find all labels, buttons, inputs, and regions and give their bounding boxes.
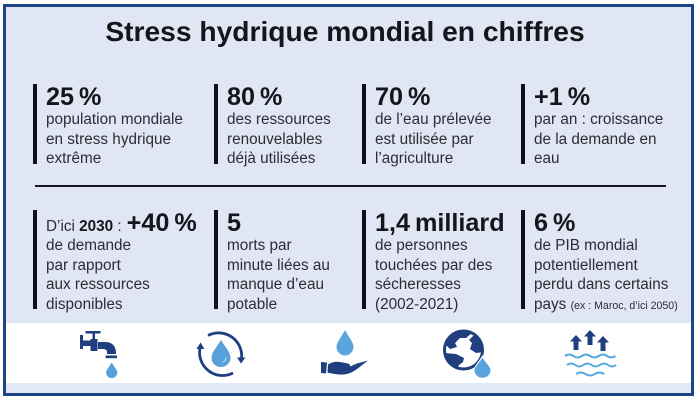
icon: water cycle <box>196 333 246 376</box>
stat: D'ici 2030 +40 %: D’ici 2030 : +40 % <box>46 209 197 237</box>
stat: 70 %: est utilisée par <box>375 131 474 148</box>
stat: 80 %: déjà utilisées <box>227 150 315 167</box>
stat: 6 %: potentiellement <box>534 257 638 274</box>
stat: 80 %: renouvelables <box>227 131 322 148</box>
divider <box>35 185 666 186</box>
stat: 5: minute liées au <box>227 257 330 274</box>
stat: +1 %: eau <box>534 150 560 167</box>
icon: rising water <box>565 330 616 376</box>
stat: 80 % <box>214 83 331 167</box>
stat: D'ici 2030 +40 %: disponibles <box>46 296 123 313</box>
stat: 25 %: extrême <box>46 150 101 167</box>
stat: 80 %: des ressources <box>227 111 331 128</box>
stat: 6 %: 6 % <box>534 209 575 237</box>
stat: 6 %: de PIB mondial <box>534 237 638 254</box>
stat: 70 %: de l’eau prélevée <box>375 111 492 128</box>
stat: +1 %: +1 % <box>534 83 590 111</box>
icon: globe with drop <box>444 331 492 379</box>
stat: +1 % <box>521 83 663 167</box>
stat: 5: morts par <box>227 237 292 254</box>
stat: 25 % <box>33 83 183 167</box>
stat: 6 %: pays (ex : Maroc, d’ici 2050) <box>534 296 678 313</box>
stat: 5: 5 <box>227 209 241 237</box>
stat: D'ici 2030 +40 % <box>33 209 197 313</box>
stat: 1,4 milliard: 1,4 milliard <box>375 209 505 237</box>
stat: 6 %: perdu dans certains <box>534 276 668 293</box>
stat: 80 %: 80 % <box>227 83 282 111</box>
stat: 1,4 milliard: (2002-2021) <box>375 296 458 313</box>
stat: D'ici 2030 +40 %: aux ressources <box>46 276 150 293</box>
stat: D'ici 2030 +40 %: par rapport <box>46 257 121 274</box>
stat: +1 %: par an : croissance <box>534 111 663 128</box>
stat: 25 %: population mondiale <box>46 111 183 128</box>
title: Stress hydrique mondial en chiffres <box>105 15 585 47</box>
stat: 5 <box>214 209 330 313</box>
stat: 70 %: 70 % <box>375 83 430 111</box>
icon: tap <box>80 331 117 378</box>
icon strip <box>6 323 691 383</box>
stat: 25 %: en stress hydrique <box>46 131 171 148</box>
stat: 5: manque d’eau <box>227 276 324 293</box>
stat: 70 %: l’agriculture <box>375 150 453 167</box>
stat: D'ici 2030 +40 %: de demande <box>46 237 131 254</box>
stat: +1 %: de la demande en <box>534 131 656 148</box>
stat: 6 % <box>521 209 678 313</box>
stat: 25 %: 25 % <box>46 83 101 111</box>
stat: 1,4 milliard <box>362 209 505 313</box>
stat: 70 % <box>362 83 492 167</box>
icon: hand with drop <box>321 330 368 375</box>
stat: 1,4 milliard: sécheresses <box>375 276 461 293</box>
stat: 1,4 milliard: touchées par des <box>375 257 492 274</box>
stat: 1,4 milliard: de personnes <box>375 237 468 254</box>
stat: 5: potable <box>227 296 277 313</box>
